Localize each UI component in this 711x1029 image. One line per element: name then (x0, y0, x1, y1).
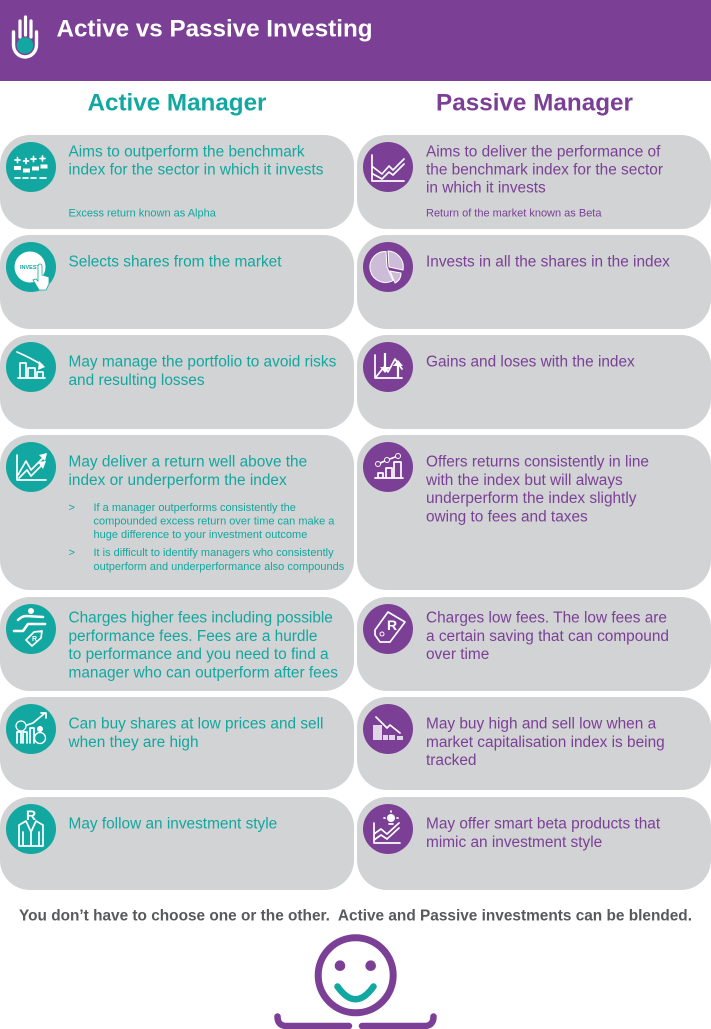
text: with the index but will always (425, 472, 623, 489)
icon: falling bars (6, 342, 56, 392)
text: underperform the index slightly (426, 490, 637, 507)
panel: passive 1 (357, 135, 711, 229)
text: Selects shares from the market (68, 254, 282, 270)
text (68, 716, 323, 751)
icon: price tag (363, 604, 413, 654)
text: Charges low fees. The low fees are (426, 610, 667, 626)
text: May follow an investment style (68, 816, 277, 832)
icon: hurdle runner and price tag (6, 604, 56, 654)
icon: hurdle runner and price tag: R (32, 636, 37, 643)
text: compounded excess return over time can make a (94, 516, 335, 528)
icon: price tag: R (387, 617, 397, 633)
icon: suit jacket (6, 804, 56, 854)
text: Invests in all the shares in the index (426, 254, 670, 270)
icon: hand logo (14, 17, 36, 57)
closing statement: You don’t have to choose one or the other. Active and Passive investments can be blended. (19, 908, 692, 924)
icon: money row (6, 142, 56, 192)
text: the benchmark index for the sector (426, 162, 663, 178)
text: index or underperform the index (68, 472, 287, 489)
text: Can buy shares at low prices and sell (68, 716, 323, 732)
text: > (68, 502, 75, 514)
heading: passive manager: Passive Manager (436, 90, 633, 116)
icon: invest button (6, 242, 56, 292)
text: performance fees. Fees are a hurdle (68, 628, 317, 645)
text: a certain saving that can compound (426, 628, 669, 645)
icon: light bulb over chart (363, 804, 413, 854)
text (68, 354, 337, 389)
text: market capitalisation index is being (426, 734, 665, 751)
icon: suit jacket: R (26, 807, 36, 823)
icon: smiley figure (278, 938, 434, 1026)
header banner (0, 0, 711, 81)
text (426, 716, 665, 769)
text: Return of the market known as Beta (426, 208, 602, 220)
text: > (68, 547, 75, 559)
title: Active vs Passive Investing (56, 16, 372, 42)
icon: up and down arrows (363, 342, 413, 392)
text: when they are high (68, 734, 199, 751)
panel: passive 5 (357, 597, 711, 691)
text: May offer smart beta products that (426, 816, 661, 832)
panel: active 4 (0, 435, 354, 590)
text: It is difficult to identify managers who consistently (94, 547, 334, 559)
text: owing to fees and taxes (426, 508, 588, 526)
panel: passive 2 (357, 235, 711, 329)
panel: active 7 (0, 797, 354, 890)
panel: active 5 (0, 597, 354, 691)
panel: passive 3 (357, 335, 711, 429)
icon: falling coin stacks (363, 704, 413, 754)
text: tracked (426, 752, 476, 769)
heading: active manager: Active Manager (88, 90, 267, 116)
panel: passive 4 (357, 435, 711, 590)
text: May deliver a return well above the (68, 454, 307, 470)
text: May buy high and sell low when a (426, 716, 657, 732)
text: If a manager outperforms consistently the (94, 502, 296, 514)
text: manager who can outperform after fees (68, 664, 338, 682)
text: in which it invests (426, 180, 546, 196)
text: Offers returns consistently in line (426, 454, 649, 470)
panel: passive 6 (357, 697, 711, 790)
text: Charges higher fees including possible (68, 610, 333, 626)
text: mimic an investment style (426, 834, 602, 851)
text: Gains and loses with the index (426, 354, 635, 370)
icon: invest button: INVEST (20, 265, 41, 271)
text: May manage the portfolio to avoid risks (68, 354, 337, 370)
icon: pie chart (363, 242, 413, 292)
text: huge difference to your investment outcome (94, 529, 307, 541)
text (68, 144, 324, 220)
panel: active 1 (0, 135, 354, 229)
icon: rising lines with arrows (6, 442, 56, 492)
text (426, 144, 663, 220)
text: and resulting losses (68, 372, 205, 389)
icon: coins and rising bars (6, 704, 56, 754)
text: over time (426, 646, 489, 663)
text (425, 454, 649, 526)
text (68, 610, 338, 682)
panel: active 6 (0, 697, 354, 790)
text: Aims to deliver the performance of (426, 144, 661, 160)
text: index for the sector in which it invests (68, 162, 324, 178)
icon: bars with trend dots (363, 442, 413, 492)
text (426, 610, 669, 663)
panel: active 2 (0, 235, 354, 329)
text: to performance and you need to find a (68, 646, 329, 663)
text (426, 816, 661, 851)
text (68, 454, 345, 573)
text: Aims to outperform the benchmark (68, 144, 305, 160)
text: Excess return known as Alpha (68, 208, 217, 220)
panel: passive 7 (357, 797, 711, 890)
panel: active 3 (0, 335, 354, 429)
icon: line chart (363, 142, 413, 192)
text: outperform and underperformance also compounds (94, 561, 345, 573)
